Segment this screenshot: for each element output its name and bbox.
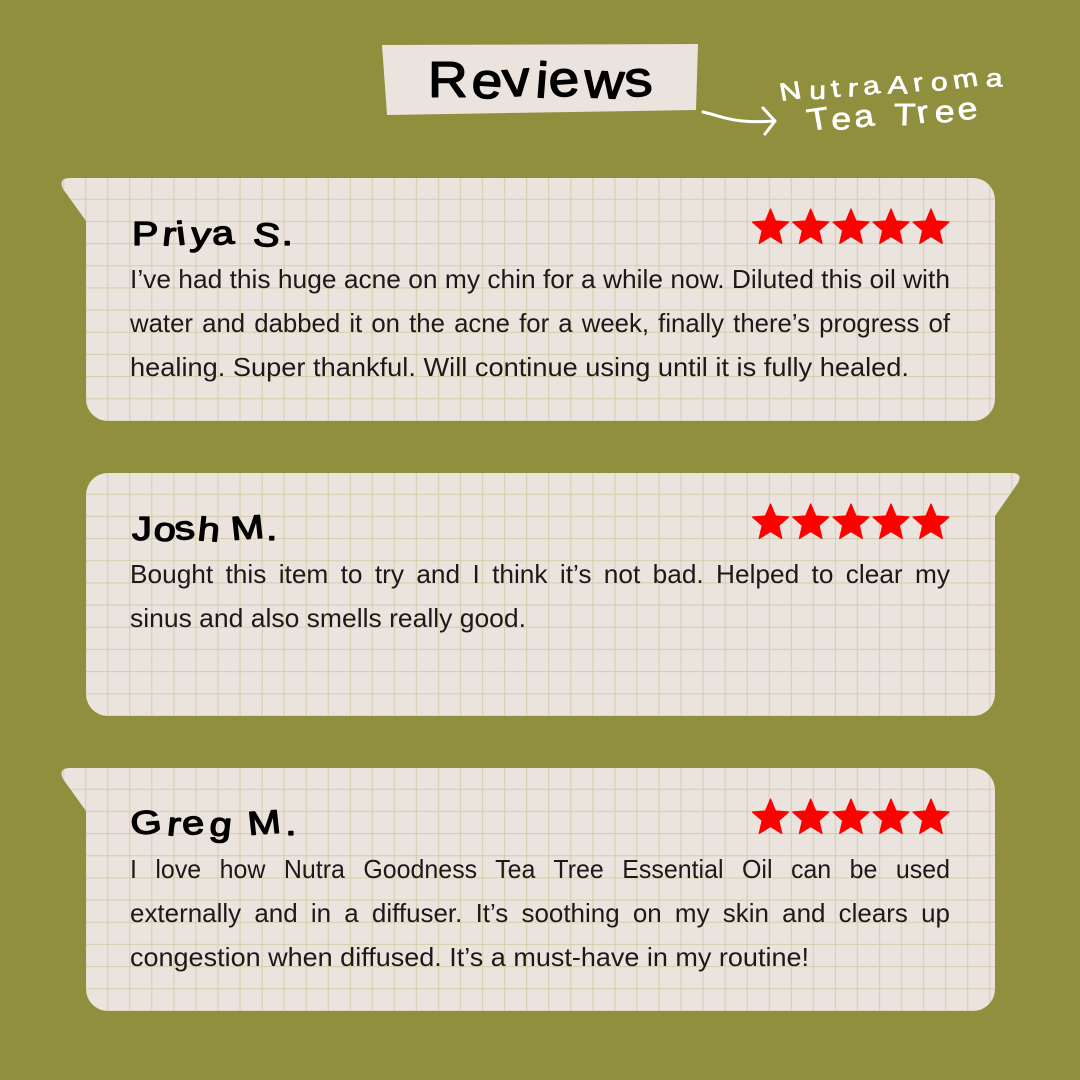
product note: NutraAroma bbox=[777, 61, 1005, 108]
panel: review Greg M. bbox=[62, 768, 995, 1011]
review text: Bought this item to try and I think it’s not bad. Helped to clear my bbox=[130, 559, 950, 589]
review text bbox=[129, 264, 951, 382]
review text bbox=[130, 854, 950, 972]
arrow bbox=[703, 108, 775, 134]
reviewer name: Josh M. bbox=[132, 508, 277, 549]
review text: water and dabbed it on the acne for a week, finally there’s progress of bbox=[129, 308, 951, 338]
product note: Tea Tree bbox=[804, 91, 980, 140]
review text: I love how Nutra Goodness Tea Tree Essential Oil can be used bbox=[130, 854, 950, 884]
review text bbox=[130, 559, 950, 633]
review text: sinus and also smells really good. bbox=[130, 603, 526, 633]
product note bbox=[777, 61, 1005, 140]
panel: review Priya S. bbox=[62, 178, 995, 421]
review text: congestion when diffused. It’s a must-have in my routine! bbox=[130, 942, 809, 972]
panel: review Josh M. bbox=[86, 473, 1020, 716]
title: Reviews bbox=[428, 50, 654, 110]
five star rating bbox=[752, 799, 949, 834]
reviewer name: Greg M. bbox=[128, 803, 296, 844]
reviewer name: Priya S. bbox=[132, 214, 293, 255]
five star rating bbox=[752, 504, 949, 538]
review text: healing. Super thankful. Will continue using until it is fully healed. bbox=[130, 352, 909, 382]
title banner bbox=[382, 44, 698, 115]
review text: externally and in a diffuser. It’s soothing on my skin and clears up bbox=[130, 898, 950, 928]
five star rating bbox=[752, 209, 949, 244]
review text: I’ve had this huge acne on my chin for a while now. Diluted this oil with bbox=[130, 264, 950, 294]
